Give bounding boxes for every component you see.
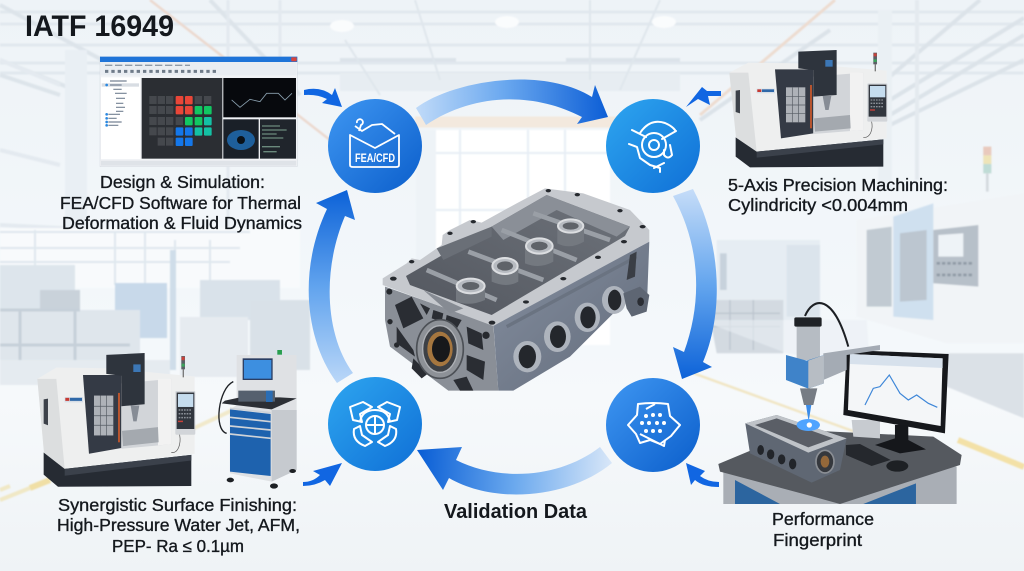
step: performance fingerprint icon bbox=[606, 378, 700, 472]
arrow: right cycle arrow bbox=[673, 189, 717, 379]
label: synergistic surface finishing: PEP- Ra ≤ 0.1µm bbox=[112, 536, 244, 556]
finishing control cabinet bbox=[219, 350, 297, 489]
bench top bbox=[718, 430, 962, 504]
step: FEA/CFD icon bbox=[328, 99, 422, 193]
label: design and simulation: Design & Simulation: bbox=[100, 172, 265, 192]
block bearing bbox=[417, 320, 463, 378]
label: synergistic surface finishing bbox=[57, 495, 300, 556]
machine: 5-axis CNC bbox=[729, 50, 887, 167]
monitor bbox=[843, 350, 949, 433]
label: 5-axis machining: Cylindricity <0.004mm bbox=[728, 195, 908, 215]
label: 5-axis machining: 5-Axis Precision Machining: bbox=[728, 175, 948, 195]
block interior bbox=[406, 195, 630, 315]
block flange bolts bbox=[386, 189, 646, 348]
label: synergistic surface finishing: Synergistic Surface Finishing: bbox=[58, 495, 297, 515]
arrow: left cycle arrow bbox=[309, 190, 355, 383]
label: performance fingerprint: Fingerprint bbox=[773, 530, 862, 550]
engine part on bench bbox=[745, 415, 847, 483]
monitor stand bbox=[852, 420, 880, 438]
arrow: bottom cycle arrow bbox=[417, 447, 612, 494]
icon: FEA/CFD envelope: FEA/CFD bbox=[355, 153, 395, 165]
block front webs bbox=[395, 297, 485, 391]
arrow: CNC to machining step bbox=[686, 87, 721, 107]
label: performance fingerprint: Performance bbox=[772, 509, 874, 529]
machine: finishing CNC bbox=[37, 353, 195, 487]
block side ports bbox=[513, 286, 626, 372]
label: validation data: Validation Data bbox=[444, 501, 588, 523]
scanner head bbox=[805, 303, 848, 347]
arrow: top cycle arrow bbox=[416, 80, 608, 125]
block top flange bbox=[383, 188, 649, 326]
step: surface finishing icon bbox=[328, 377, 422, 471]
arrow: software to FEA/CFD bbox=[304, 88, 342, 107]
engine block bbox=[383, 188, 649, 391]
label: design and simulation: Deformation & Fluid Dynamics bbox=[62, 213, 302, 233]
block right side bbox=[493, 242, 649, 391]
label: synergistic surface finishing: High-Pressure Water Jet, AFM, bbox=[57, 515, 300, 535]
step: machining icon bbox=[606, 99, 700, 193]
label: design and simulation bbox=[60, 172, 302, 233]
title: IATF 16949 bbox=[25, 10, 174, 43]
simulation software screenshot bbox=[100, 57, 297, 167]
arrow: finishing step to finishing machines bbox=[303, 463, 342, 486]
label: design and simulation: FEA/CFD Software for Thermal bbox=[60, 193, 301, 213]
label: 5-axis machining bbox=[728, 175, 948, 215]
bench cabinet bbox=[723, 467, 957, 504]
test bench with scanner and monitor bbox=[718, 303, 962, 504]
block bosses bbox=[456, 226, 584, 304]
arrow: bench to fingerprint step bbox=[686, 463, 719, 487]
block front face bbox=[385, 287, 498, 391]
label: performance fingerprint bbox=[772, 509, 874, 550]
